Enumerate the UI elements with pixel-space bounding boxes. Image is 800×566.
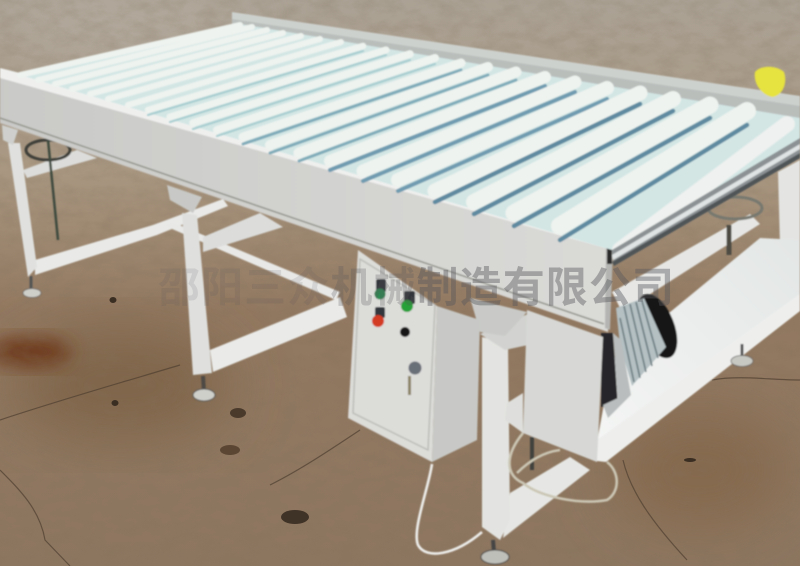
- watermark text: 邵阳三众机械制造有限公司: [158, 264, 674, 311]
- middle leg assembly: [163, 185, 347, 401]
- electric motor: [601, 288, 685, 418]
- yellow plastic bag: [755, 67, 785, 97]
- rollers: [20, 25, 787, 250]
- key lock: [408, 362, 422, 395]
- side steel shaft: [612, 138, 800, 266]
- roller shadow stripes: [148, 51, 747, 240]
- electric control box: [348, 250, 480, 462]
- green button left: [374, 279, 386, 300]
- back rail: [232, 12, 800, 122]
- left leg assembly: [2, 125, 228, 298]
- red button: [372, 307, 385, 327]
- shelf and motor support: [597, 160, 800, 462]
- roller deck: [20, 24, 800, 266]
- right leg and side panel: [470, 298, 603, 564]
- power cables: [417, 433, 617, 554]
- conveyor side frame: [0, 68, 613, 332]
- black button: [400, 327, 410, 337]
- green button right: [401, 291, 415, 312]
